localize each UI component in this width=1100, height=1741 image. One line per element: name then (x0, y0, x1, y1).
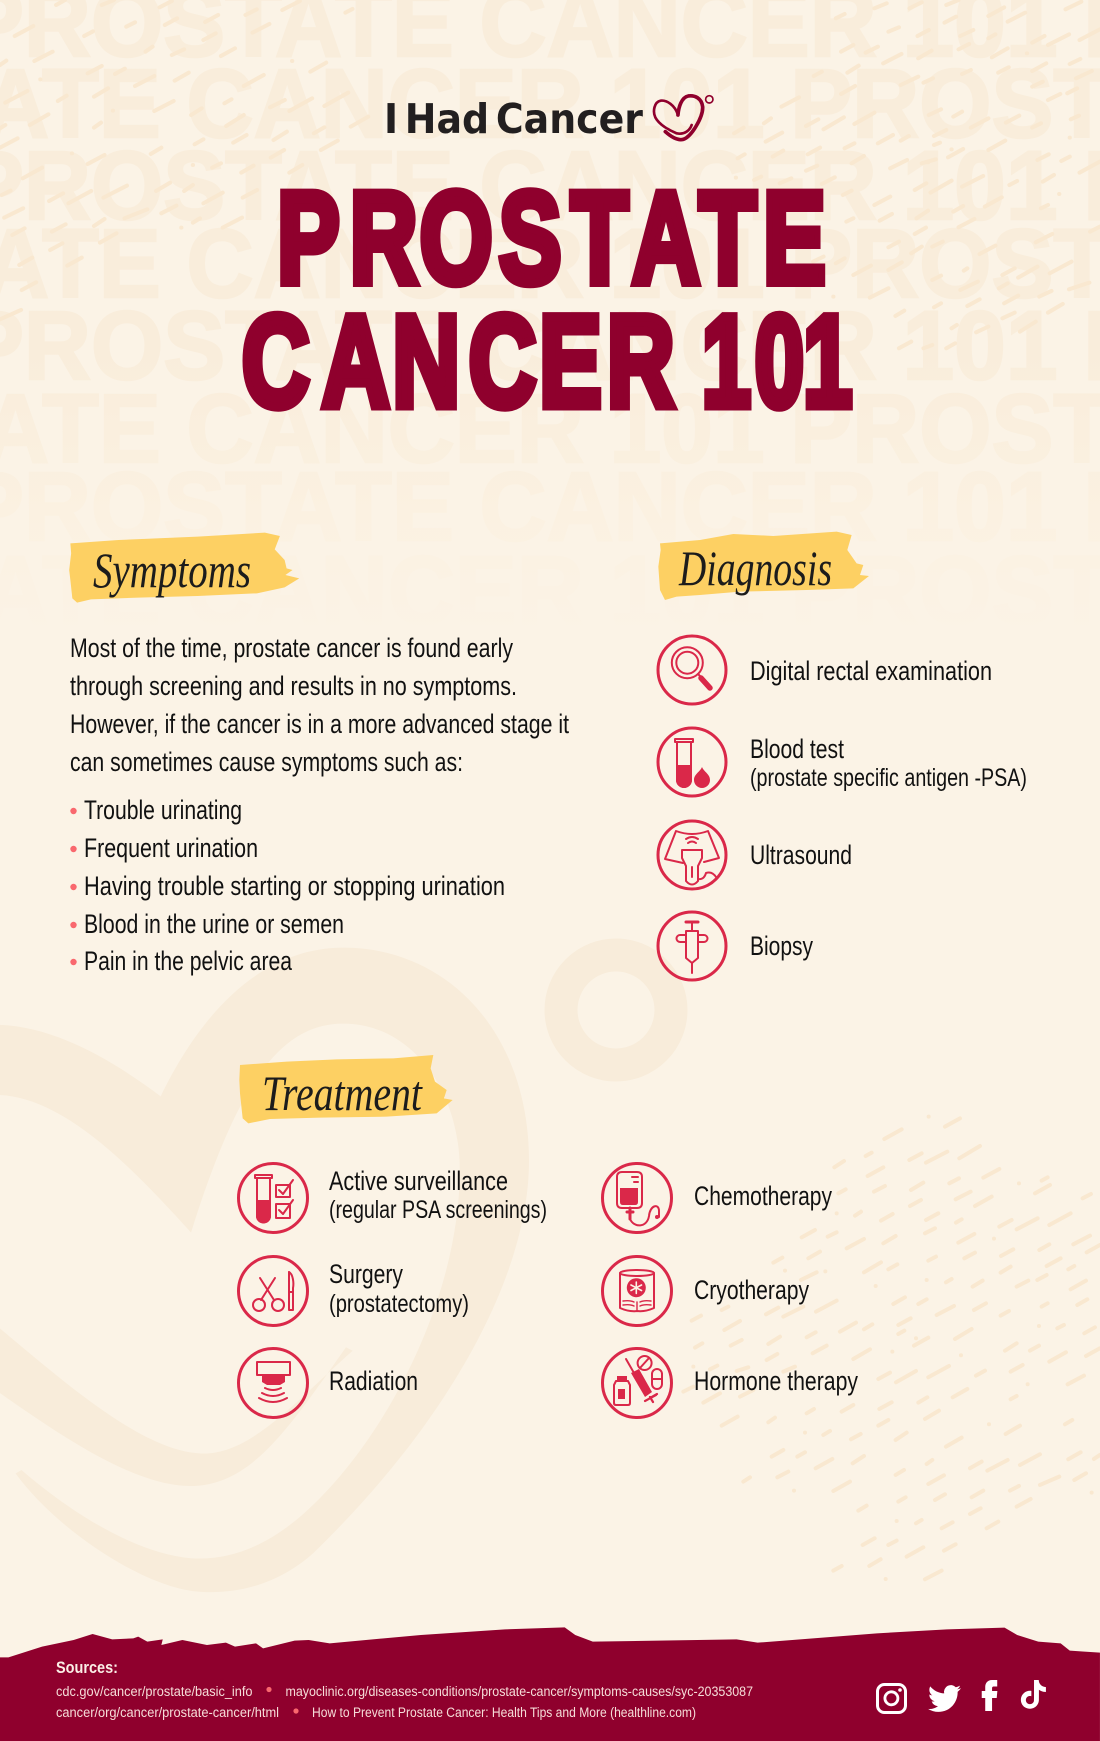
symptoms intro paragraph: can sometimes cause symptoms such as: (70, 747, 463, 777)
background heart mark (0, 948, 671, 1592)
symptoms bullet list: Pain in the pelvic area (84, 946, 292, 976)
symptoms intro paragraph: Most of the time, prostate cancer is found early (70, 633, 514, 663)
icon: hormone therapy vial, syringe and pills (602, 1348, 672, 1418)
sources list: cdc.gov/cancer/prostate/basic_info (56, 1684, 252, 1699)
panel: treatment (238, 1055, 859, 1418)
icon: instagram (878, 1684, 906, 1712)
icon: cryotherapy chamber (602, 1256, 672, 1326)
sources list (56, 1684, 753, 1720)
icon: tube and checklist (238, 1164, 308, 1232)
title: Prostate Cancer 101: CANCER (242, 289, 675, 435)
text: digital rectal examination: Digital rectal examination (750, 656, 992, 686)
logo wordmark: I Had Cancer (384, 95, 644, 143)
text: blood test (750, 734, 1027, 792)
symptoms bullet list: Blood in the urine or semen (84, 909, 344, 939)
icon: scissors and scalpel (238, 1256, 308, 1326)
sources list: cancer/org/cancer/prostate-cancer/html (56, 1705, 279, 1720)
text: blood test: Blood test (750, 734, 845, 764)
sources list: How to Prevent Prostate Cancer: Health Tips and More (healthline.com) (312, 1705, 696, 1720)
watermark: repeated PROSTATE CANCER 101 text (0, 0, 1100, 645)
text: surgery: (prostatectomy) (329, 1290, 469, 1318)
footer band (0, 1627, 1100, 1741)
sources list: mayoclinic.org/diseases-conditions/prostate-cancer/symptoms-causes/syc-20353087 (286, 1684, 753, 1699)
text: surgery: Surgery (329, 1259, 404, 1289)
icon: twitter (928, 1685, 961, 1712)
symptoms intro paragraph: through screening and results in no symptoms. (70, 671, 517, 701)
icon: ultrasound probe (658, 821, 726, 889)
title: Prostate Cancer 101 (242, 165, 852, 435)
heading: diagnosis: Diagnosis (678, 540, 832, 596)
sources heading: Sources: (56, 1658, 118, 1677)
title: Prostate Cancer 101: 101 (702, 288, 852, 434)
text: active surveillance: (regular PSA screenings) (329, 1196, 547, 1224)
icon: blood test tube and drop (658, 728, 726, 796)
text: chemotherapy: Chemotherapy (694, 1181, 833, 1211)
icon: chemotherapy IV bag (602, 1164, 672, 1232)
text: active surveillance: Active surveillance (329, 1166, 508, 1196)
icon: tiktok (1021, 1680, 1046, 1709)
text: hormone therapy: Hormone therapy (694, 1366, 859, 1396)
footer torn shape (0, 1627, 1100, 1741)
title: Prostate Cancer 101: PROSTATE (277, 165, 826, 311)
panel: diagnosis (658, 532, 1027, 980)
panel: symptoms (69, 533, 570, 976)
logo: I Had Cancer (384, 95, 713, 143)
text: biopsy: Biopsy (750, 931, 814, 961)
heading: symptoms: Symptoms (93, 542, 251, 598)
heading: treatment: Treatment (262, 1065, 423, 1121)
icon: facebook (982, 1680, 997, 1711)
symptoms bullet list (70, 795, 505, 976)
text: cryotherapy: Cryotherapy (694, 1275, 810, 1305)
text: radiation: Radiation (329, 1366, 418, 1396)
icon: biopsy syringe (658, 912, 726, 980)
symptoms intro paragraph: However, if the cancer is in a more advanced stage it (70, 709, 570, 739)
text: surgery (329, 1259, 469, 1318)
symptoms bullet list: Having trouble starting or stopping urination (84, 871, 505, 901)
logo heart (654, 96, 713, 140)
symptoms bullet list: Frequent urination (84, 833, 258, 863)
text: blood test: (prostate specific antigen -PSA) (750, 764, 1027, 792)
text: ultrasound: Ultrasound (750, 840, 852, 870)
text: active surveillance (329, 1166, 547, 1224)
icon: magnifying glass (658, 636, 726, 704)
icon: radiation machine (238, 1348, 308, 1418)
symptoms intro paragraph (70, 633, 570, 777)
symptoms bullet list: Trouble urinating (84, 795, 242, 825)
